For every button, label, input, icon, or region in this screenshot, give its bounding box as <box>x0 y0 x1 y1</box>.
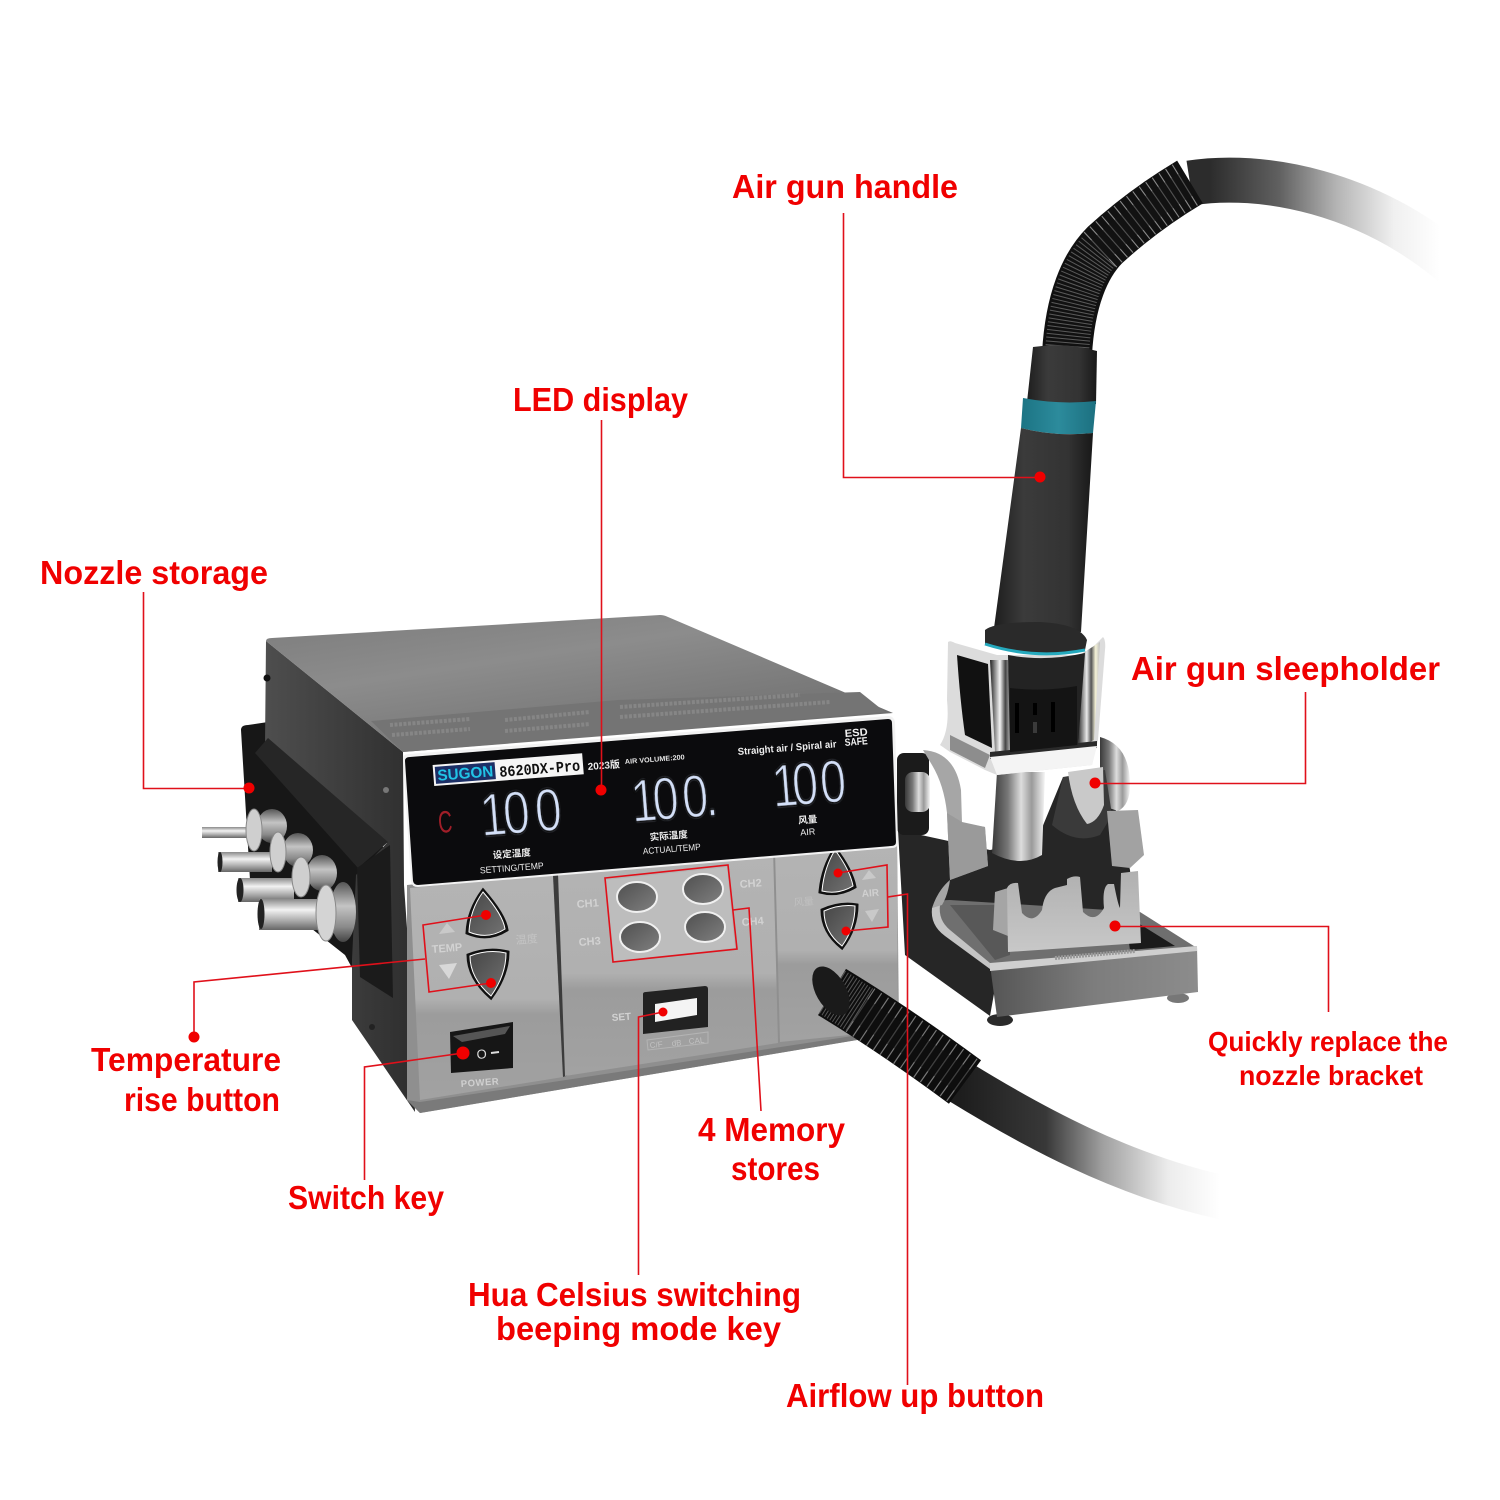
callout: LED display: LED display <box>513 381 689 418</box>
left panel: POWER <box>460 1076 499 1090</box>
right panel: 风量 <box>793 895 814 909</box>
callout: Airflow up button <box>786 865 1044 1414</box>
LED display panel: ESD <box>844 726 869 740</box>
black side bracket <box>241 722 395 998</box>
brand plate <box>433 753 584 787</box>
actual label: ACTUAL/TEMP <box>642 842 701 856</box>
right panel: AIR <box>861 888 880 900</box>
middle panel: dB <box>671 1038 682 1048</box>
callout: Quickly replace the nozzle bracket <box>1110 920 1448 1091</box>
callout: Nozzle storage: Nozzle storage <box>40 554 268 591</box>
callout: Air gun handle: Air gun handle <box>732 168 958 205</box>
callout: Temperature rise button <box>91 910 496 1118</box>
callout: Nozzle storage <box>40 554 268 794</box>
chrome sleeve holder <box>940 637 1105 775</box>
stand back shadow body <box>898 777 1135 1016</box>
brand plate: 8620DX-Pro <box>499 758 581 782</box>
station side face <box>265 641 415 1112</box>
actual label: 实际温度 <box>649 828 689 843</box>
callout: Air gun sleepholder: Air gun sleepholder <box>1131 650 1440 687</box>
callout: Switch key: Switch key <box>288 1179 445 1216</box>
front lower body <box>407 838 899 1113</box>
top label strip <box>371 692 885 752</box>
setting label <box>479 846 544 876</box>
middle panel: CH3 <box>578 935 601 949</box>
power switch <box>450 1022 513 1073</box>
rear cable fading out <box>1190 180 1462 272</box>
middle panel: CH1 <box>576 897 599 911</box>
setting label: SETTING/TEMP <box>479 861 544 876</box>
rear plate strip <box>255 738 388 868</box>
actual label <box>642 828 701 856</box>
callout: Temperature rise button: rise button <box>124 1081 280 1118</box>
callout: Quickly replace the nozzle bracket: nozzle bracket <box>1239 1060 1423 1091</box>
nozzle bracket <box>993 871 1141 952</box>
top face <box>266 615 893 752</box>
middle panel: CAL <box>688 1036 705 1046</box>
callout: 4 Memory stores: 4 Memory <box>698 1111 846 1148</box>
LED display panel: AIR VOLUME:200 <box>625 754 685 766</box>
callout: 4 Memory stores: stores <box>731 1150 820 1187</box>
LED display panel: SAFE <box>844 735 868 749</box>
left panel <box>410 873 569 1100</box>
stand base <box>932 900 1198 1026</box>
callout: Quickly replace the nozzle bracket: Quickly replace the <box>1208 1026 1448 1057</box>
callout: Airflow up button: Airflow up button <box>786 1377 1044 1414</box>
red unit indicator: C <box>437 804 454 840</box>
base lip <box>407 1029 899 1113</box>
storage nozzles <box>202 809 356 942</box>
air down button <box>822 904 857 948</box>
callout: Air gun sleepholder <box>1090 650 1440 788</box>
air digits: 100 <box>769 748 849 820</box>
right panel <box>775 838 898 1042</box>
left panel: TEMP <box>431 942 463 956</box>
stand left arm and knob <box>897 750 988 908</box>
hot air station product illustration <box>202 180 1462 1198</box>
air label: 风量 <box>798 814 818 827</box>
brand plate: SUGON <box>437 763 494 785</box>
middle panel: C/F <box>649 1040 663 1050</box>
middle panel <box>558 848 778 1076</box>
temperature down button <box>468 950 508 998</box>
memory buttons <box>617 874 725 952</box>
temperature up button <box>467 890 507 937</box>
LED display panel: Straight air / Spiral air <box>737 739 837 758</box>
actual temperature digits: 100. <box>628 762 720 835</box>
callout: Switch key <box>288 1046 470 1216</box>
base engraving <box>1055 951 1135 958</box>
air gun handle <box>985 345 1097 752</box>
middle panel: CH2 <box>739 877 762 891</box>
LED display panel: 2023版 <box>587 758 620 773</box>
callout: Hua Celsius switching beeping mode key: beeping mode key <box>496 1310 782 1347</box>
callout: Hua Celsius switching beeping mode key <box>468 1008 801 1347</box>
air up button <box>820 848 855 894</box>
middle panel: CH4 <box>741 915 765 929</box>
middle panel: SET <box>611 1011 632 1024</box>
callout: Temperature rise button: Temperature <box>91 1041 281 1078</box>
callout: Hua Celsius switching beeping mode key: Hua Celsius switching <box>468 1276 801 1313</box>
lower black plate <box>357 845 393 998</box>
air label <box>798 814 818 838</box>
callout: Air gun handle <box>732 168 1046 482</box>
screws <box>264 674 270 682</box>
SET key <box>643 986 708 1034</box>
callout: 4 Memory stores <box>605 865 846 1187</box>
callout: LED display <box>513 381 689 796</box>
setting label: 设定温度 <box>492 846 532 861</box>
setting temperature digits: 100 <box>477 776 564 849</box>
front hose <box>805 960 1225 1198</box>
left panel: O <box>476 1046 487 1062</box>
LED display panel <box>403 716 898 887</box>
gun strain relief spring <box>1067 182 1190 354</box>
right arm <box>1052 737 1144 868</box>
air label: AIR <box>800 826 816 838</box>
steel cylinder <box>992 772 1045 861</box>
left panel: 温度 <box>515 931 538 947</box>
